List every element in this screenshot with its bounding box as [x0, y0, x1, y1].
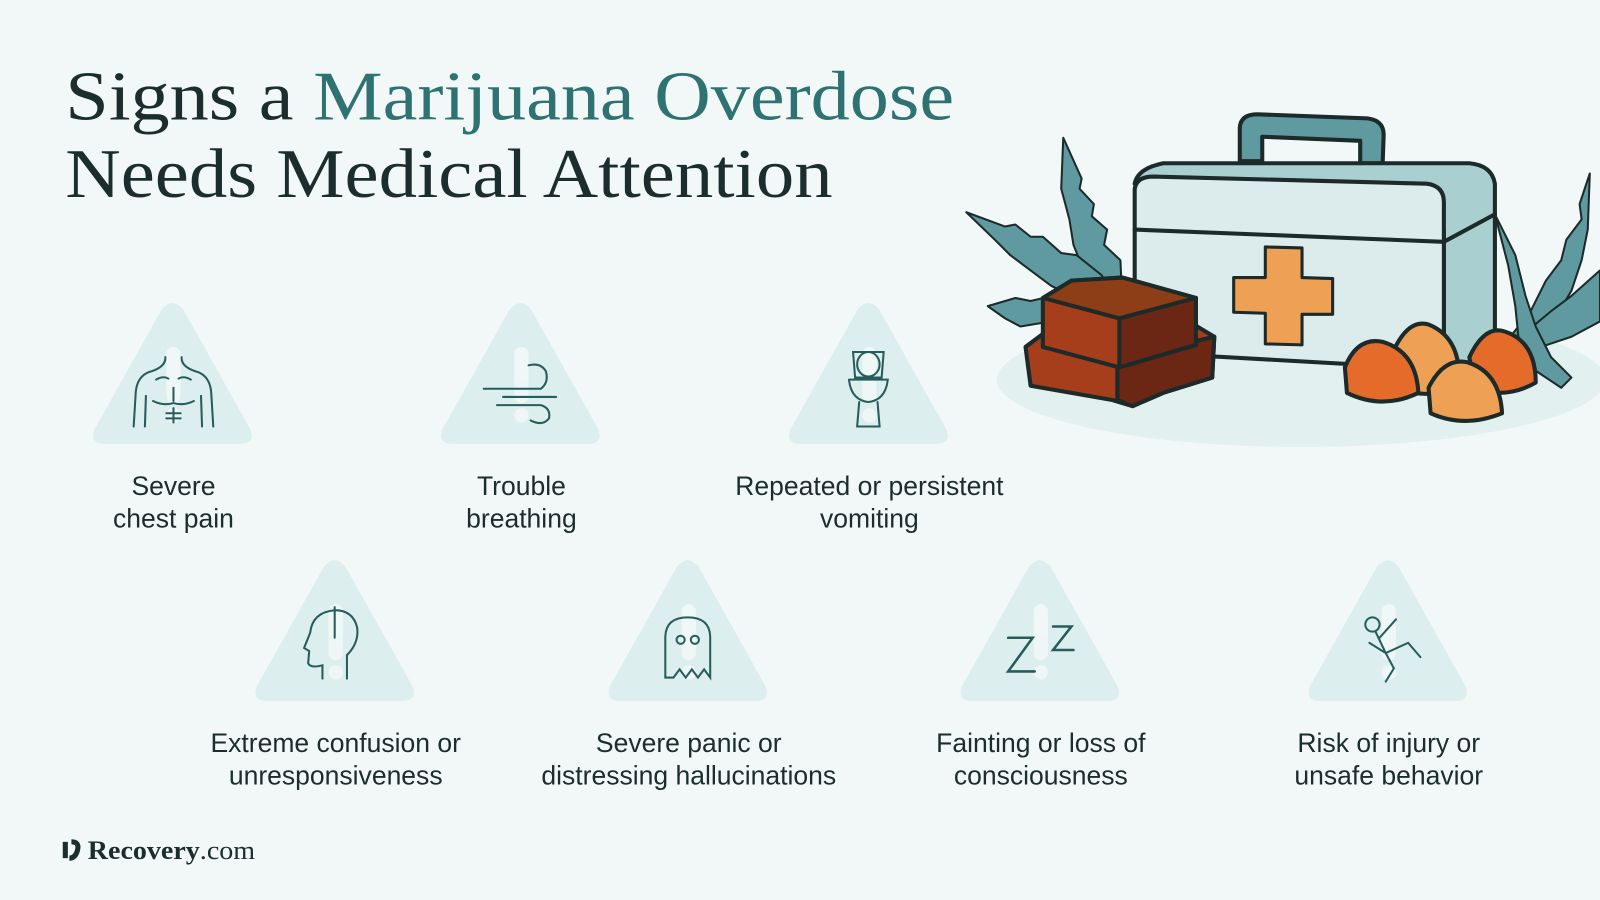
icon: chest: [134, 357, 213, 427]
icon: zzz: [1008, 627, 1073, 671]
title: [65, 58, 954, 213]
icon: toilet: [849, 352, 888, 427]
brownies: [1026, 324, 1214, 406]
handle: [1240, 114, 1384, 163]
labels: Extreme confusion or: [210, 728, 461, 758]
gumdrops: [1393, 324, 1459, 394]
labels: chest pain: [113, 504, 234, 534]
labels: unsafe behavior: [1294, 761, 1483, 791]
labels: Risk of injury or: [1297, 728, 1480, 758]
labels: Trouble: [477, 471, 566, 501]
labels: breathing: [466, 504, 577, 534]
labels: Repeated or persistent: [735, 471, 1004, 501]
icon: falling person: [1365, 617, 1420, 682]
exclamation marks: [166, 347, 1396, 680]
kit front: [1135, 177, 1444, 369]
title: Signs a Marijuana Overdose: [65, 58, 954, 135]
labels: vomiting: [820, 504, 919, 534]
logo: Recovery.com: [88, 835, 255, 865]
illustration: first aid kit with edibles: [966, 114, 1600, 447]
icon: wind: [484, 365, 556, 423]
icon: ghost: [665, 617, 710, 678]
title: Needs Medical Attention: [65, 136, 833, 213]
labels: [113, 471, 1483, 791]
icons: [134, 352, 1420, 682]
labels: distressing hallucinations: [541, 761, 836, 791]
labels: consciousness: [954, 761, 1128, 791]
kit top/back face: [1135, 163, 1495, 367]
symptom triangles: [93, 303, 1467, 701]
cross: [1234, 247, 1333, 345]
labels: Fainting or loss of: [936, 728, 1146, 758]
leaves left: [966, 138, 1122, 327]
labels: Severe panic or: [596, 728, 782, 758]
labels: unresponsiveness: [229, 761, 443, 791]
leaves right: [1495, 173, 1600, 388]
icon: head: [304, 607, 357, 679]
labels: Severe: [131, 471, 215, 501]
